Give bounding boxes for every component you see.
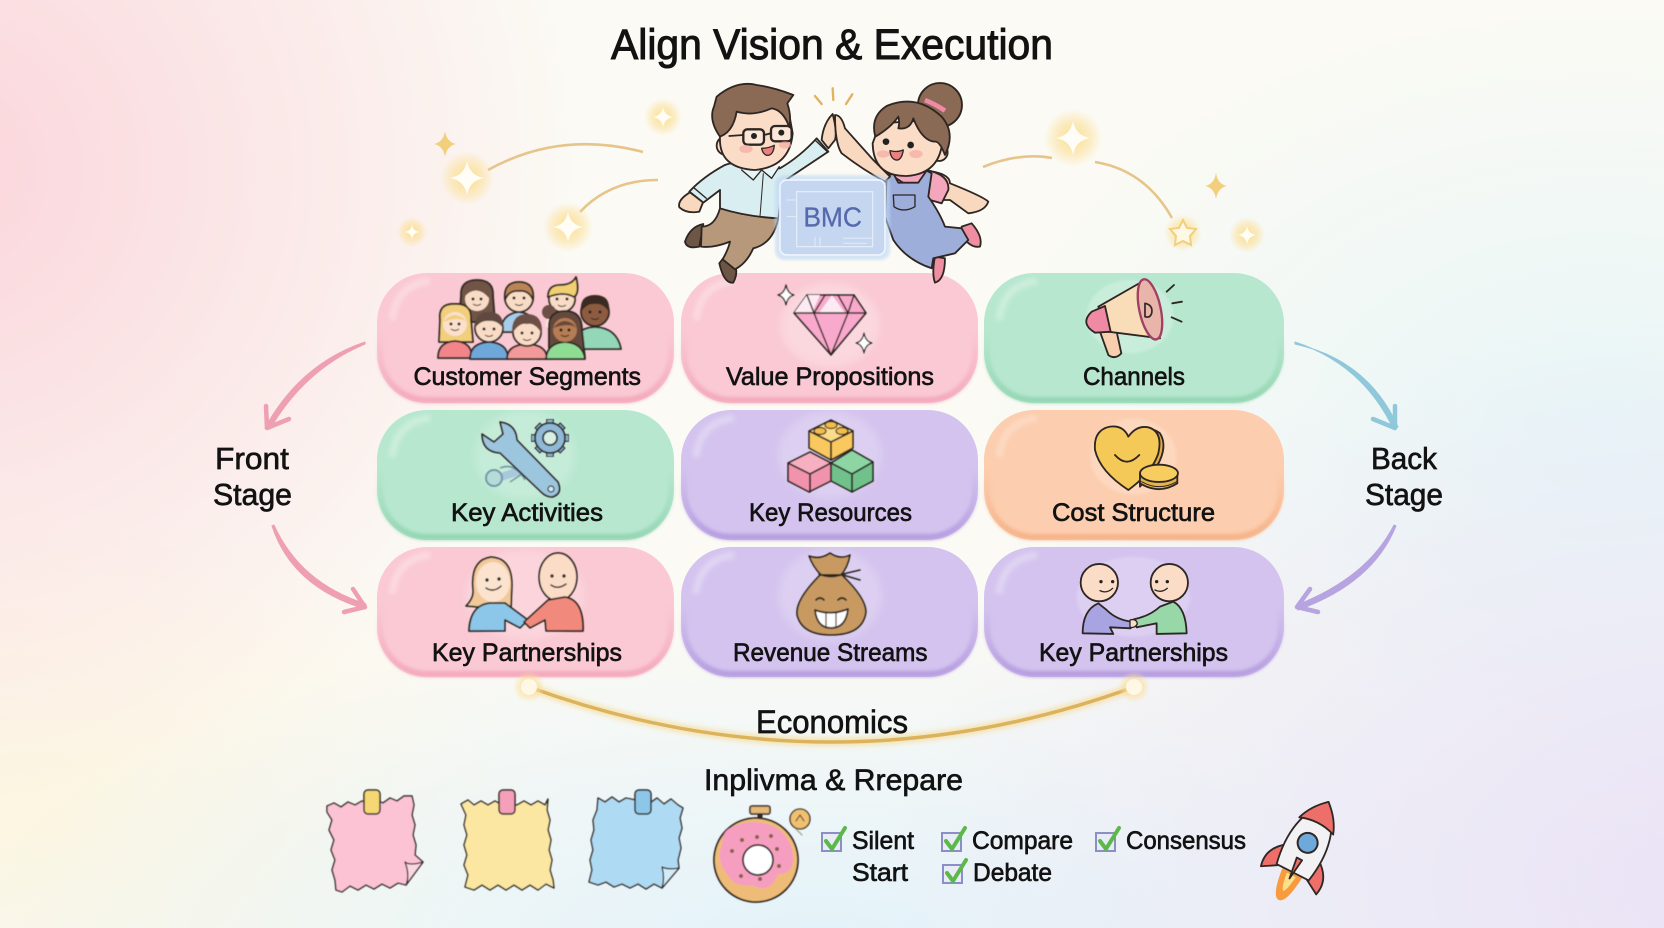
icon: high-five burst [815,88,852,104]
decorative sparkles and arcs, left [397,98,682,252]
arrow: back stage return [1297,525,1396,612]
icon: diamond [778,283,880,367]
panel: cost structure [984,410,1284,540]
icon: two people shaking hands [1077,557,1190,637]
card: key partnerships [984,547,1284,677]
icon: megaphone [1086,277,1182,357]
checklist item: silent start: Silent [852,827,914,855]
checklist item: debate: Debate [973,859,1052,887]
card: key partnerships [377,547,674,677]
arrow: front stage up [265,342,365,429]
economics connector arc [513,671,1150,742]
panel: key resources [681,410,978,540]
characters high-fiving over BMC panel [679,83,988,283]
panel: customer segments [377,273,674,403]
arrow: front stage down [272,525,366,612]
checklist item: silent start [822,827,914,887]
card: key resources [681,410,978,540]
label: front stage: Stage [213,477,292,512]
icon: smiling money bag [778,549,882,641]
heading: preparation row: Inplivma & Rrepare [704,764,963,797]
label: key resources: Key Resources [749,499,912,527]
panel: key partnerships, right [984,547,1284,677]
card: customer segments [377,273,674,403]
icon: heart and coins [1090,418,1178,495]
card: cost structure [984,410,1284,540]
label: back stage: Back [1371,441,1437,476]
label: key partnerships: Key Partnerships [432,639,622,667]
label: key activities: Key Activities [451,499,603,527]
card: value propositions [681,273,978,403]
icon: rocket [1250,787,1357,914]
panel: value propositions [681,273,978,403]
icon: two people shaking hands [465,550,585,640]
label: channels: Channels [1083,363,1185,391]
checklist item: consensus: Consensus [1126,827,1246,855]
label: economics: Economics [756,704,908,740]
icon: wrench and gear [475,411,575,499]
BMC glowing panel [775,175,890,260]
label: front stage [213,441,292,512]
panel: key activities [377,410,674,540]
icon: donut timer [714,806,810,902]
panel: key partnerships, left [377,547,674,677]
label: BMC: BMC [803,202,862,233]
label: value propositions: Value Propositions [726,363,934,391]
label: front stage: Front [215,441,289,476]
label: cost structure: Cost Structure [1052,499,1215,527]
label: back stage [1365,441,1443,512]
label: customer segments: Customer Segments [414,363,641,391]
decorative sparkles and arcs, right [983,109,1265,253]
card: key activities [377,410,674,540]
panel: revenue streams [681,547,978,677]
arrow: back stage down [1295,342,1398,428]
label: back stage: Stage [1365,477,1443,512]
checklist item: compare: Compare [972,827,1073,855]
sticky note: pink [327,790,423,892]
label: key partnerships: Key Partnerships [1039,639,1228,667]
woman character [835,83,988,283]
man character [679,84,836,283]
icon: group of people [438,277,621,359]
sticky note: yellow [461,790,554,890]
checklist item: silent start: Start [852,859,908,887]
title: Align Vision & Execution [611,21,1053,69]
sticky note: blue [589,790,683,889]
card: revenue streams [681,547,978,677]
card: channels [984,273,1284,403]
panel: channels [984,273,1284,403]
label: revenue streams: Revenue Streams [733,639,928,667]
icon: building blocks [778,411,882,499]
